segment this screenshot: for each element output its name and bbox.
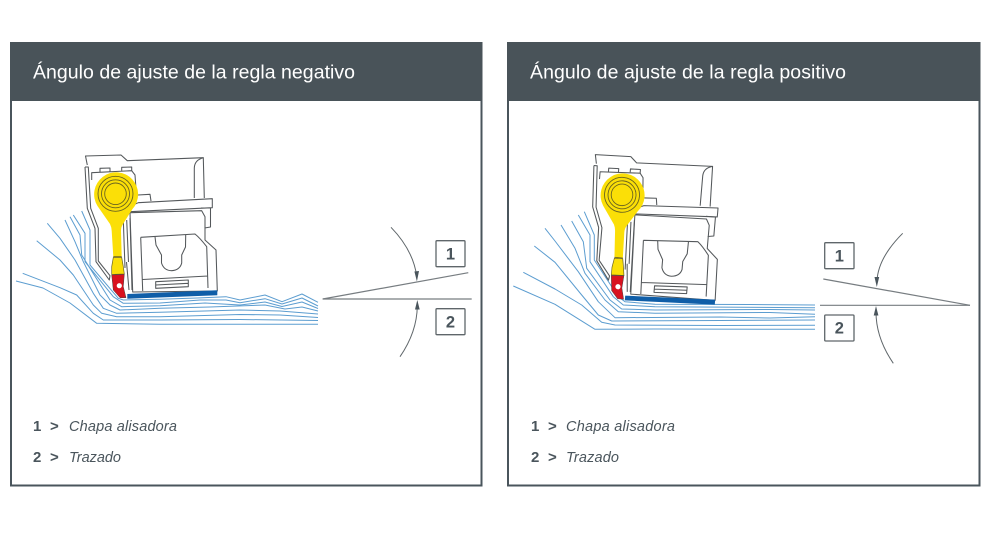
header: negative angle [10, 42, 482, 101]
paver screed: positive [583, 154, 727, 308]
legend: negative: Trazado [69, 450, 121, 466]
legend: negative [33, 418, 177, 466]
legend: positive: > [548, 449, 557, 466]
callout box 1 [436, 241, 465, 267]
callout box 1 [825, 243, 854, 269]
legend: negative: > [50, 418, 59, 435]
callout box 2: 2 [835, 320, 844, 338]
plate: blue [625, 292, 715, 308]
callout box 2: 2 [446, 314, 455, 332]
angle diagram: negative [323, 227, 472, 357]
plate: blue [127, 290, 217, 299]
panel: negative angle [10, 42, 482, 486]
callout box 2 [825, 315, 854, 341]
legend: positive: 2 [531, 449, 539, 466]
angle diagram: positive [820, 233, 970, 363]
callout box 1: 1 [835, 248, 844, 266]
legend: negative: Chapa alisadora [69, 419, 177, 435]
header: negative angle: Ángulo de ajuste de la regla negativo [33, 60, 355, 84]
panel: positive angle [507, 42, 980, 486]
legend: positive [531, 418, 675, 466]
paver screed: negative [85, 155, 217, 299]
legend: negative: > [50, 449, 59, 466]
arm: yellow [594, 172, 646, 277]
legend: positive: 1 [531, 418, 539, 435]
legend: positive: Chapa alisadora [566, 419, 675, 435]
header: positive angle [507, 42, 980, 101]
material layers: positive [513, 212, 815, 329]
callout box 2 [436, 309, 465, 335]
legend: negative: 1 [33, 418, 41, 435]
arm: yellow [94, 172, 138, 274]
legend: negative: 2 [33, 449, 41, 466]
legend: positive: > [548, 418, 557, 435]
blade: red [609, 275, 626, 299]
callout box 1: 1 [446, 246, 455, 264]
blade: red [112, 274, 126, 298]
material layers: negative [16, 211, 318, 324]
header: positive angle: Ángulo de ajuste de la regla positivo [530, 60, 846, 84]
legend: positive: Trazado [566, 450, 619, 466]
